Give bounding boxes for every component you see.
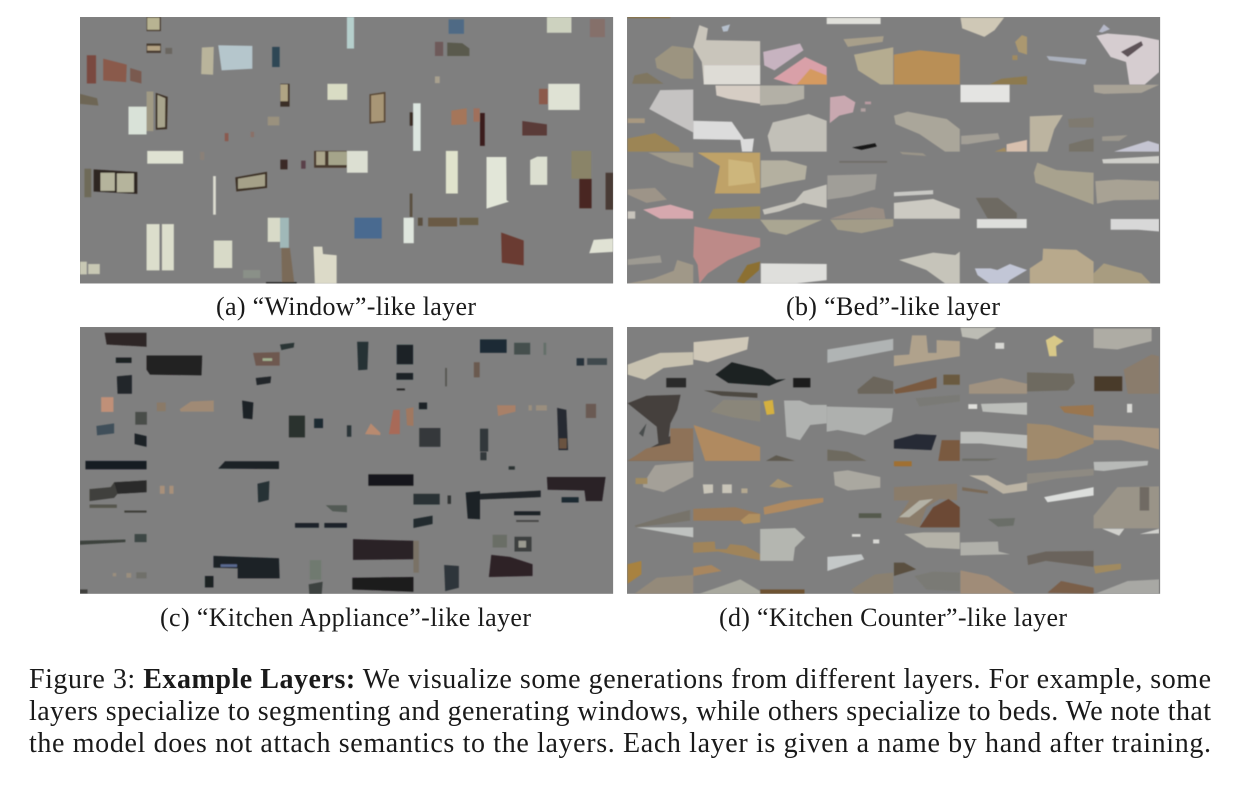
panel: kitchen counter-like layer image [627, 327, 1160, 594]
panel: bed-like layer image [627, 17, 1160, 283]
figure description text: the model does not attach semantics to the layers. Each layer is given a name by hand after training. [29, 728, 1211, 759]
figure description text [29, 664, 1211, 759]
caption (d): (d) “Kitchen Counter”-like layer [719, 603, 1067, 632]
panel: window-like layer image [80, 17, 613, 284]
caption (a): (a) “Window”-like layer [216, 292, 476, 321]
caption (b): (b) “Bed”-like layer [786, 292, 1000, 321]
figure description text: layers specialize to segmenting and generating windows, while others specialize to beds. We note that [29, 696, 1211, 727]
caption (c): (c) “Kitchen Appliance”-like layer [160, 603, 531, 632]
figure description text: Figure 3: Example Layers: We visualize some generations from different layers. For example, some [29, 664, 1211, 695]
panel: kitchen appliance-like layer image [80, 327, 613, 594]
